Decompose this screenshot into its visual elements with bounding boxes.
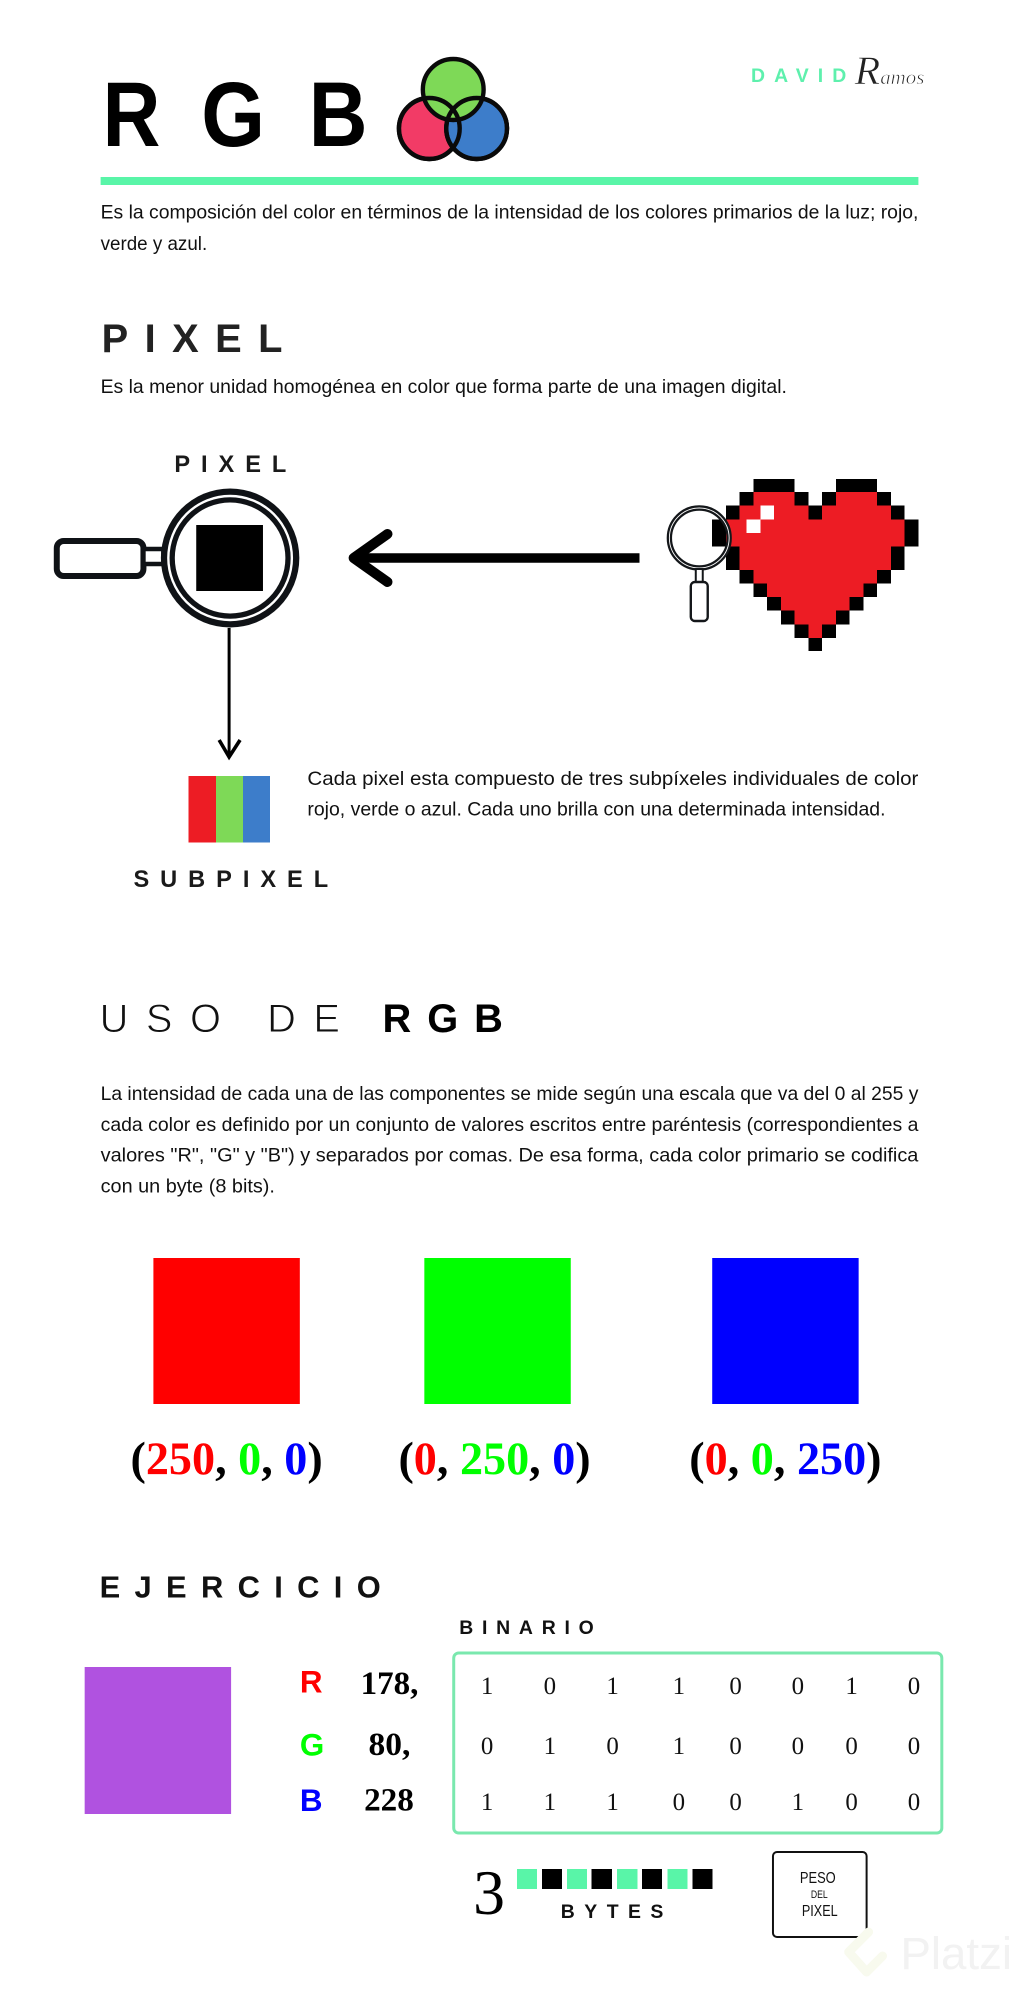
usage explanation text: con un byte (8 bits). <box>101 1177 275 1198</box>
RGB channel letters: G <box>300 1727 324 1763</box>
title: RGB: R <box>103 64 160 166</box>
box: peso del pixel: PESO <box>800 1870 836 1887</box>
label: PIXEL: PIXEL <box>174 452 297 478</box>
title: RGB <box>103 64 368 166</box>
RGB channel letters: B <box>300 1783 322 1818</box>
label: SUBPIXEL: SUBPIXEL <box>133 867 339 893</box>
binary table: 11100100 <box>481 1789 920 1816</box>
icon: big magnifier with pixel <box>57 488 299 628</box>
author signature: DAVID <box>751 65 855 87</box>
heading: USO DE RGB <box>100 997 519 1041</box>
box: peso del pixel: DEL <box>811 1889 828 1901</box>
author signature: Ramos <box>854 48 925 93</box>
title: RGB: G <box>201 64 265 166</box>
heading: EJERCICIO: EJERCICIO <box>100 1569 395 1605</box>
decimal values: 228 <box>364 1782 414 1819</box>
green divider bar <box>101 177 918 185</box>
heading: USO DE RGB: RGB <box>383 997 519 1041</box>
box: peso del pixel: PIXEL <box>802 1903 838 1920</box>
icon: small magnifier <box>669 508 729 621</box>
subpixel RGB stripes <box>189 776 270 842</box>
decimal values: 80, <box>369 1727 410 1763</box>
author signature <box>751 48 925 93</box>
decimal values: 178, <box>361 1666 418 1702</box>
box: peso del pixel <box>773 1852 867 1937</box>
subpixel explanation text: Cada pixel esta compuesto de tres subpíxeles individuales de color <box>307 769 918 790</box>
arrow: pixel to subpixel <box>219 628 240 757</box>
bytes indicator <box>473 1857 713 1928</box>
arrow: heart to pixel <box>354 534 639 582</box>
binary table: 10110010 <box>481 1673 920 1700</box>
bytes indicator: 3 <box>473 1857 505 1928</box>
swatch: green <box>398 1258 591 1485</box>
swatch: green: (0, 250, 0) <box>398 1433 591 1485</box>
pixel definition text: Es la menor unidad homogénea en color que forma parte de una imagen digital. <box>101 377 787 398</box>
binary table: 01010000 <box>481 1733 920 1760</box>
section: pixel <box>57 317 918 893</box>
usage explanation text: valores "R", "G" y "B") y separados por comas. De esa forma, cada color primario se codifica <box>101 1146 919 1167</box>
purple swatch <box>85 1667 231 1814</box>
intro text <box>101 202 918 255</box>
RGB channel letters: R <box>300 1664 323 1700</box>
subpixel explanation text <box>307 769 918 821</box>
swatch: blue: (0, 0, 250) <box>689 1433 882 1485</box>
heading: PIXEL: PIXEL <box>102 317 299 361</box>
watermark: Platzi: Platzi <box>900 1928 1012 1979</box>
binary table <box>454 1653 942 1833</box>
icon: overlapping RGB circles <box>399 59 507 159</box>
icon: pixel heart <box>712 479 918 651</box>
section: uso de RGB <box>100 997 919 1485</box>
usage explanation text: cada color es definido por un conjunto de valores escritos entre paréntesis (correspondientes a <box>101 1115 919 1136</box>
title: RGB: B <box>309 64 368 166</box>
usage explanation text: La intensidad de cada una de las componentes se mide según una escala que va del 0 al 255 y <box>101 1084 919 1105</box>
section: ejercicio <box>85 1569 942 1937</box>
intro text: verde y azul. <box>101 234 207 255</box>
heading: USO DE RGB: USO DE <box>100 997 358 1041</box>
watermark: Platzi <box>849 1928 1012 1979</box>
usage explanation text <box>101 1084 919 1198</box>
bytes indicator: BYTES <box>561 1901 673 1923</box>
header <box>101 48 925 255</box>
label: BINARIO: BINARIO <box>459 1617 603 1639</box>
subpixel explanation text: rojo, verde o azul. Cada uno brilla con una determinada intensidad. <box>307 799 886 821</box>
swatch: red <box>130 1258 323 1485</box>
swatch: blue <box>689 1258 882 1485</box>
swatch: red: (250, 0, 0) <box>130 1433 323 1485</box>
decimal values <box>361 1666 418 1819</box>
RGB channel letters <box>300 1664 324 1818</box>
intro text: Es la composición del color en términos de la intensidad de los colores primarios de la luz; rojo, <box>101 202 918 224</box>
